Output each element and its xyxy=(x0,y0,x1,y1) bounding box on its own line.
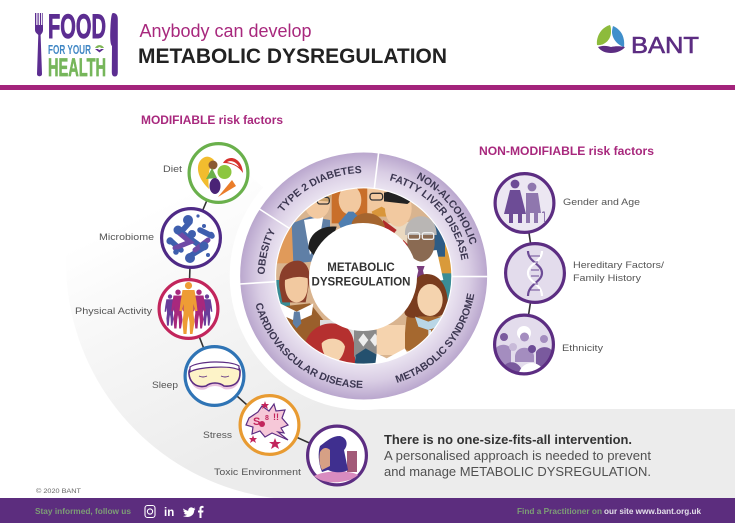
toxic environment label: Toxic Environment xyxy=(214,467,301,478)
centre label: DYSREGULATION xyxy=(312,276,410,288)
ring label: obesity: OBESITY xyxy=(258,228,274,274)
factor: hereditary xyxy=(506,244,664,302)
title: METABOLIC DYSREGULATION xyxy=(138,45,447,68)
copyright: © 2020 BANT xyxy=(36,487,81,495)
icon: fork xyxy=(35,13,43,76)
factor: stress xyxy=(203,396,299,454)
icon: facebook xyxy=(198,506,204,518)
heading: non-modifiable risk factors: NON-MODIFIABLE risk factors xyxy=(479,146,654,158)
callout line two: and manage METABOLIC DYSREGULATION. xyxy=(384,465,651,479)
icon: couple xyxy=(504,180,545,223)
connectors: non-modifiable factors xyxy=(524,203,535,344)
footer follow text: Stay informed, follow us xyxy=(35,507,132,516)
heading: modifiable risk factors: MODIFIABLE risk factors xyxy=(141,115,283,127)
factor: physical activity xyxy=(75,280,218,338)
stress circle xyxy=(240,396,299,454)
header rule xyxy=(0,85,735,90)
logo petal green xyxy=(597,25,611,45)
ring label: cardiovascular disease: CARDIOVASCULAR DISEASE xyxy=(256,303,362,388)
icon: sleep mask xyxy=(189,362,240,390)
icon: heart of fruit and vegetables xyxy=(198,157,243,197)
icon: angry speech burst: 8 xyxy=(265,415,269,422)
physical activity circle xyxy=(159,280,218,338)
sleep circle xyxy=(185,347,244,405)
footer practitioner text: Find a Practitioner on xyxy=(517,507,602,516)
ethnicity circle background xyxy=(495,315,553,374)
ring label: type 2 diabetes: TYPE 2 DIABETES xyxy=(277,166,362,211)
callout text xyxy=(384,432,652,479)
factor: diet xyxy=(163,144,248,202)
logo petal blue xyxy=(612,26,624,47)
white halo around ring xyxy=(230,142,498,410)
factor: toxic environment xyxy=(214,426,366,485)
footer bar xyxy=(0,498,735,523)
icon: crouching person xyxy=(314,436,358,482)
icon: linkedin: in xyxy=(164,507,174,519)
callout headline: There is no one-size-fits-all intervention. xyxy=(384,432,632,447)
icon: runners xyxy=(165,282,212,334)
logo word HEALTH: HEALTH xyxy=(48,54,106,82)
grey swoosh background xyxy=(66,84,735,500)
logo petal purple xyxy=(598,46,625,53)
heading: anybody can develop: Anybody can develop xyxy=(140,21,312,41)
factor: microbiome xyxy=(99,209,220,267)
ethnicity label: Ethnicity xyxy=(562,343,603,354)
logo: BANT xyxy=(597,25,699,58)
ring dividers xyxy=(240,153,488,284)
ethnicity circle border xyxy=(495,315,553,374)
hereditary label: Hereditary Factors/ xyxy=(573,260,664,271)
icon: DNA helix xyxy=(528,251,542,296)
logo word BANT: BANT xyxy=(631,32,699,58)
ring label: metabolic syndrome: METABOLIC SYNDROME xyxy=(395,293,474,383)
people collage xyxy=(273,183,455,370)
hereditary label: Family History xyxy=(573,273,641,284)
footer background xyxy=(0,498,735,523)
footer site text: our site www.bant.org.uk xyxy=(604,507,702,516)
microbiome label: Microbiome xyxy=(99,232,154,243)
icon: instagram xyxy=(145,506,155,518)
factor: gender and age xyxy=(495,174,640,232)
ring segments xyxy=(240,152,487,399)
icon: angry speech burst xyxy=(246,401,288,449)
icon: group of people xyxy=(496,326,552,372)
ring label: fatty liver disease: FATTY LIVER DISEASE xyxy=(390,174,468,260)
logo words FOR YOUR: FOR YOUR xyxy=(48,42,91,57)
diet label: Diet xyxy=(163,164,182,175)
centre label: METABOLIC xyxy=(327,262,395,274)
gender and age circle xyxy=(495,174,554,232)
stress label: Stress xyxy=(203,430,232,441)
ring label: non-alcoholic: NON-ALCOHOLIC xyxy=(416,172,476,244)
icon: microbes xyxy=(166,214,214,263)
factor: ethnicity xyxy=(495,315,603,378)
logo word FOOD: FOOD xyxy=(48,8,106,46)
central people ring xyxy=(240,152,488,400)
callout line one: A personalised approach is needed to prevent xyxy=(384,449,652,463)
icon: angry speech burst: !! xyxy=(273,412,279,422)
icon: twitter xyxy=(183,507,196,517)
toxic environment circle xyxy=(308,426,366,485)
inner white edge xyxy=(276,188,452,364)
gender and age label: Gender and Age xyxy=(563,197,640,208)
centre white circle xyxy=(309,223,417,331)
logo small wheel xyxy=(95,45,104,52)
icon: knife xyxy=(110,13,118,76)
centre label xyxy=(312,262,410,288)
icon: angry speech burst: S xyxy=(253,416,260,428)
sleep label: Sleep xyxy=(152,380,178,391)
logo: Food for your Health xyxy=(35,8,118,82)
microbiome circle xyxy=(162,209,220,267)
physical activity label: Physical Activity xyxy=(75,306,152,317)
hereditary circle xyxy=(506,244,564,302)
diet circle xyxy=(189,144,248,202)
connectors: modifiable factors xyxy=(188,173,337,456)
hereditary label xyxy=(573,260,664,284)
factor: sleep xyxy=(152,347,244,405)
